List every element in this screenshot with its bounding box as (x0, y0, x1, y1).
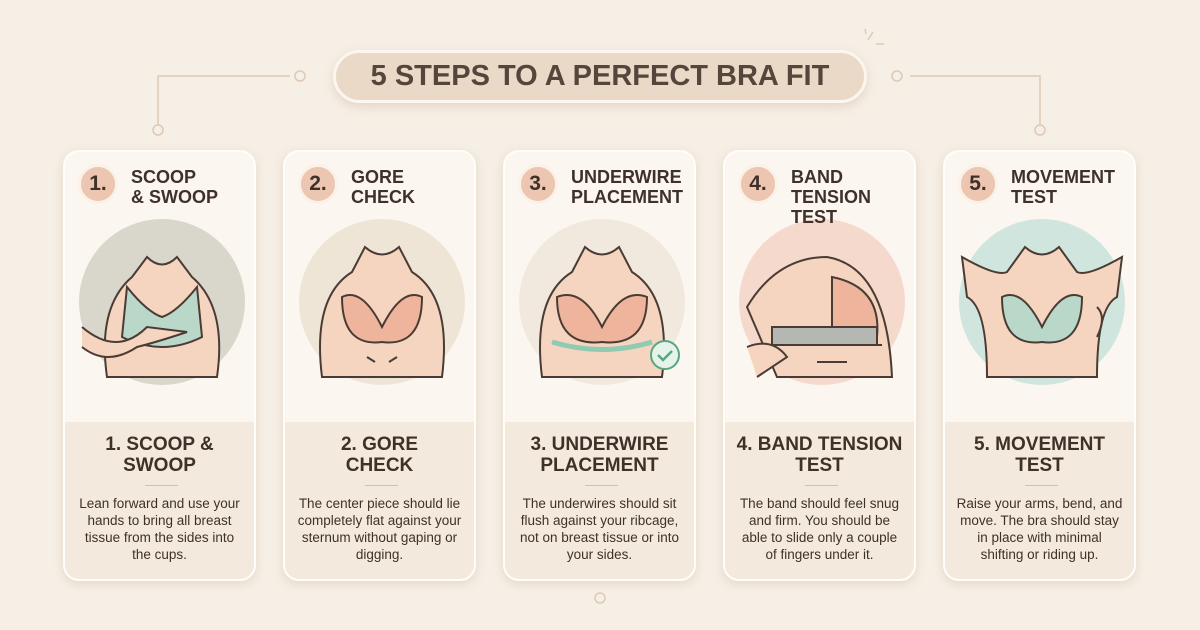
title (333, 50, 867, 103)
panel: step 2: CHECK (346, 455, 413, 476)
icon: gore illustration (299, 219, 465, 385)
panel: step 5: TEST (1015, 455, 1064, 476)
panel: step 2: 2. (309, 172, 327, 195)
panel: step 4: BAND (791, 167, 843, 187)
panel: step 4: 4. BAND TENSION (737, 434, 902, 455)
panel: step 1: & SWOOP (131, 187, 218, 207)
panel: step 2: GORE (351, 167, 404, 187)
panel: step 4: TEST (791, 207, 837, 227)
panel: step 5: TEST (1011, 187, 1057, 207)
panel: step 3: PLACEMENT (571, 187, 683, 207)
panel: step 2: 2. GORE (341, 434, 418, 455)
icon: movement illustration (959, 219, 1125, 385)
panel: step 3: UNDERWIRE (571, 167, 682, 187)
panel: step 3: 3. (529, 172, 547, 195)
panel: step 3: PLACEMENT (540, 455, 659, 476)
panel: step 1: SWOOP (123, 455, 196, 476)
panel: step 1: Lean forward and use your hands to bring all breast tissue from the sides into the cups. (79, 496, 240, 562)
panel: step 2: The center piece should lie completely flat against your sternum without gaping or digging. (298, 496, 461, 562)
panel: step 2: CHECK (351, 187, 415, 207)
panel: step 5: 5. (969, 172, 987, 195)
panel: step 1 (63, 150, 256, 581)
panel: step 3: 3. UNDERWIRE (531, 434, 668, 455)
panel: step 4: The band should feel snug and firm. You should be able to slide only a couple of fingers under it. (740, 496, 899, 562)
panel: step 5: MOVEMENT (1011, 167, 1115, 187)
panel: step 1: 1. (89, 172, 107, 195)
panel: step 3: The underwires should sit flush against your ribcage, not on breast tissue or into your sides. (520, 496, 679, 562)
panel: step 1: 1. SCOOP & (105, 434, 214, 455)
panel: step 1: SCOOP (131, 167, 196, 187)
panel: step 5: 5. MOVEMENT (974, 434, 1105, 455)
panel: step 3 (503, 150, 696, 581)
icon: underwire illustration (519, 219, 685, 385)
panel: step 5 (943, 150, 1136, 581)
panel: step 5: Raise your arms, bend, and move. The bra should stay in place with minimal shifting or riding up. (957, 496, 1122, 562)
icon: scoop illustration (79, 219, 245, 385)
icon: band illustration (739, 219, 905, 385)
panel: step 4: TENSION (791, 187, 871, 207)
panel: step 4: TEST (795, 455, 844, 476)
panel: step 4: 4. (749, 172, 767, 195)
panel: step 2 (283, 150, 476, 581)
panel: step 4 (723, 150, 916, 581)
title: 5 STEPS TO A PERFECT BRA FIT (371, 60, 829, 92)
